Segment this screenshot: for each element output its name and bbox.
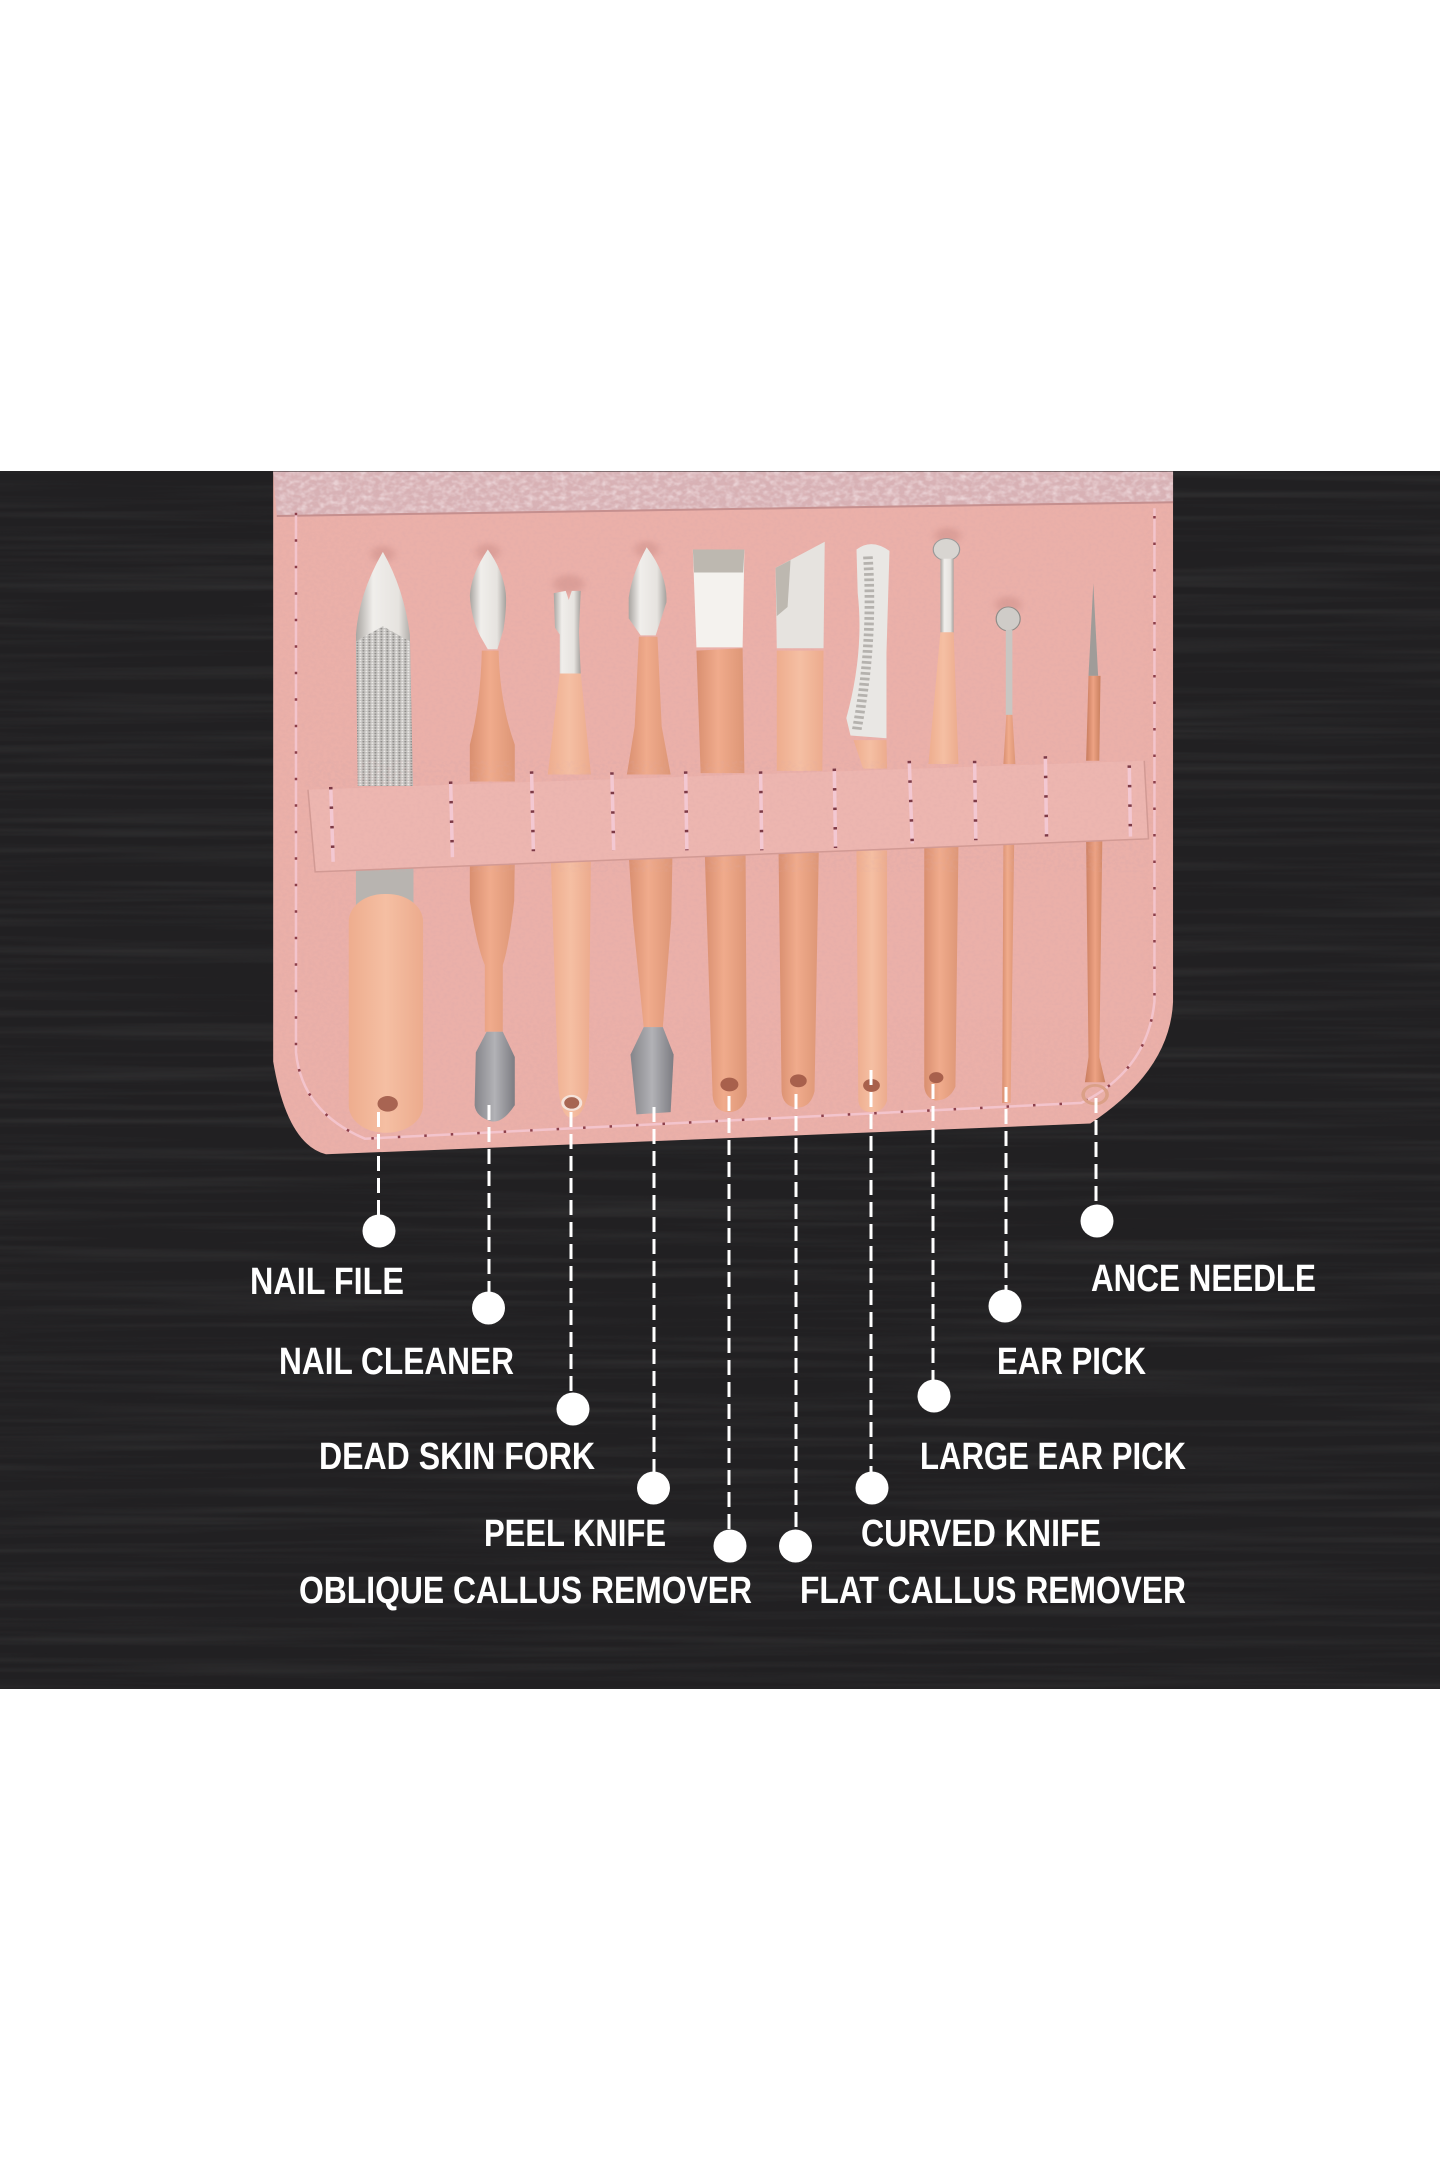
elastic strap bbox=[308, 756, 1148, 872]
tool: flat callus remover bbox=[776, 542, 825, 1108]
callout: curved knife: CURVED KNIFE bbox=[861, 1513, 1101, 1555]
tool: acne needle bbox=[1083, 583, 1107, 1104]
callout: curved knife bbox=[856, 1070, 1101, 1555]
tool: curved knife bbox=[846, 544, 889, 1112]
callout: nail file bbox=[250, 1112, 404, 1303]
dark streaked background band bbox=[0, 471, 1440, 1689]
callout: acne needle: ANCE NEEDLE bbox=[1091, 1258, 1316, 1300]
callout: ear pick bbox=[988, 1087, 1146, 1383]
callout: ear pick: EAR PICK bbox=[997, 1341, 1146, 1383]
callout: peel knife: PEEL KNIFE bbox=[484, 1513, 666, 1555]
tool: dead skin fork bbox=[548, 591, 591, 1118]
tool: large ear pick bbox=[924, 539, 960, 1101]
tool: peel knife bbox=[627, 547, 674, 1114]
pouch body bbox=[273, 471, 1173, 1156]
callout: flat callus remover: FLAT CALLUS REMOVER bbox=[800, 1570, 1186, 1612]
leather pouch with tools bbox=[273, 471, 1173, 1156]
callout: oblique callus remover: OBLIQUE CALLUS REMOVER bbox=[299, 1570, 752, 1612]
callout: peel knife bbox=[484, 1107, 670, 1555]
tool: nail file bbox=[349, 552, 423, 1133]
tool: oblique callus remover bbox=[693, 550, 747, 1112]
tool: ear pick bbox=[996, 607, 1020, 1103]
callout: dead skin fork: DEAD SKIN FORK bbox=[319, 1436, 595, 1478]
pouch perimeter stitching bbox=[296, 508, 1154, 1139]
callout: nail file: NAIL FILE bbox=[250, 1261, 404, 1303]
callout: flat callus remover bbox=[779, 1094, 1186, 1612]
callout: large ear pick: LARGE EAR PICK bbox=[920, 1436, 1186, 1478]
callout: oblique callus remover bbox=[299, 1096, 752, 1612]
callout: nail cleaner: NAIL CLEANER bbox=[279, 1341, 514, 1383]
tool: nail cleaner bbox=[470, 550, 515, 1122]
tool shadows bbox=[371, 528, 1021, 613]
callout: nail cleaner bbox=[279, 1105, 514, 1383]
callout: acne needle bbox=[1080, 1098, 1316, 1300]
callout: large ear pick bbox=[918, 1084, 1186, 1478]
callout: dead skin fork bbox=[319, 1112, 595, 1478]
strap stitches bbox=[331, 756, 1130, 862]
